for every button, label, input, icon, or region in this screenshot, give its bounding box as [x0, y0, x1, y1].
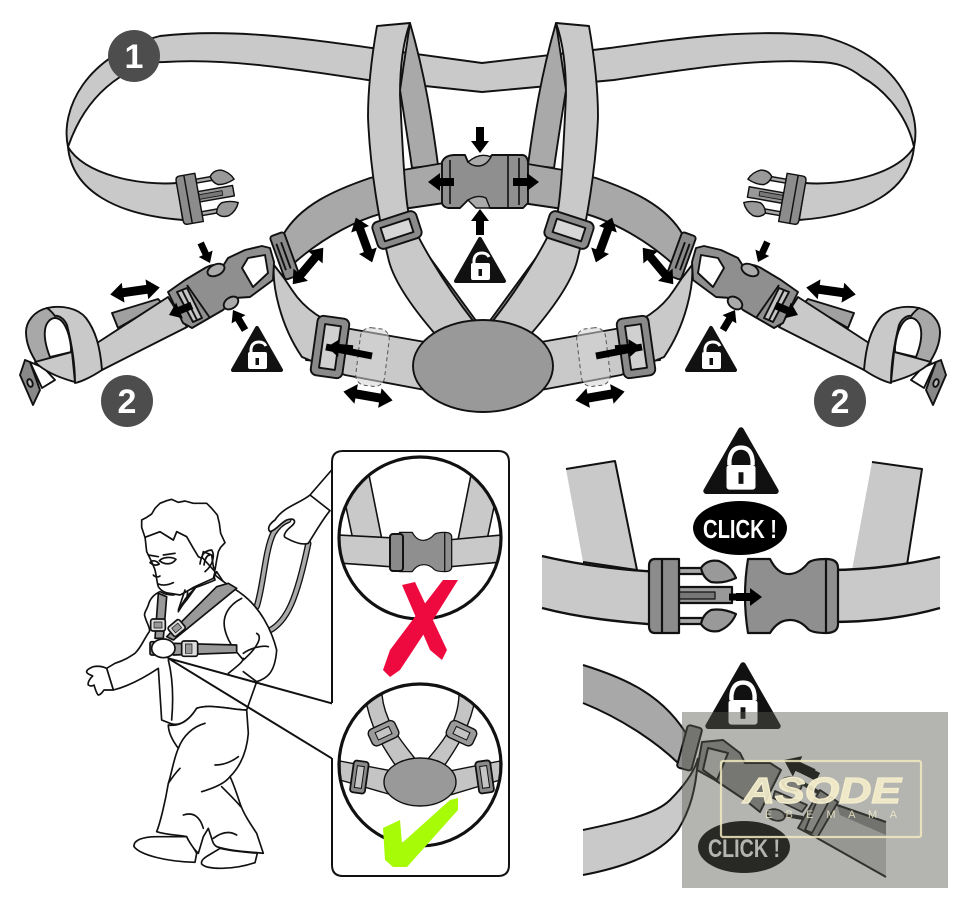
- click label: [693, 501, 787, 555]
- second strap: [817, 805, 886, 877]
- top strap: [67, 33, 915, 220]
- watermark: [682, 712, 948, 888]
- boy harness: [150, 583, 237, 658]
- female buckle: [745, 559, 838, 633]
- belt right: [830, 557, 940, 622]
- boy placket and sleeve lines: [168, 588, 268, 720]
- badge 1: 1: [125, 38, 143, 76]
- watermark: E B E M A M A: [765, 809, 898, 821]
- panel: side click diagram: [583, 665, 886, 877]
- boy trousers: [157, 706, 263, 853]
- male buckle: [766, 775, 838, 838]
- click label: [698, 821, 790, 873]
- icon: closed lock: [708, 665, 778, 726]
- click label: CLICK !: [708, 835, 780, 863]
- badge 2 left: [101, 375, 153, 427]
- watermark: ASODE: [742, 770, 902, 811]
- green check: [383, 798, 458, 867]
- correct position circle: [339, 684, 501, 846]
- arrow: [779, 750, 818, 784]
- arrows: top harness: [109, 127, 857, 410]
- boy torso: [107, 573, 277, 724]
- adult hand and lead: [257, 470, 332, 631]
- badge 2 left: 2: [118, 383, 136, 421]
- dark strap: [583, 665, 690, 765]
- panel: comparison box: [332, 451, 509, 876]
- boy hand: [87, 666, 113, 695]
- icon: open lock centre: [456, 239, 504, 281]
- panel: boy illustration, zoom coordinates: [87, 470, 332, 868]
- right male buckle: [742, 167, 807, 225]
- ladder lock: [677, 725, 702, 771]
- male buckle: [649, 559, 736, 633]
- boy face: [145, 532, 215, 595]
- badge 2 right: 2: [831, 383, 849, 421]
- light strap: [583, 758, 698, 875]
- panel: click buckle diagram: [542, 430, 940, 633]
- icon: open lock left: [233, 328, 281, 370]
- red cross: [383, 580, 458, 677]
- boy collar: [178, 572, 223, 610]
- badge 2 right: [814, 375, 866, 427]
- icon: closed lock: [706, 430, 776, 491]
- harness right half: [489, 23, 946, 405]
- callout wedge lines: [168, 658, 332, 758]
- icon: open lock right: [687, 328, 735, 370]
- wrong position circle: [335, 455, 505, 619]
- centre buckle: [442, 155, 528, 208]
- female buckle with ring: [697, 740, 781, 812]
- boy shoes: [134, 837, 197, 862]
- harness left half: [20, 23, 477, 405]
- arrow: [729, 588, 762, 606]
- click label: CLICK !: [703, 514, 777, 544]
- boy hair: [142, 499, 225, 570]
- boy ear and features: [148, 550, 213, 585]
- vertical straps: [566, 461, 922, 570]
- belt left: [542, 556, 660, 625]
- badge 1: [108, 30, 160, 82]
- chest plate: [413, 320, 553, 412]
- left male buckle: [175, 167, 240, 225]
